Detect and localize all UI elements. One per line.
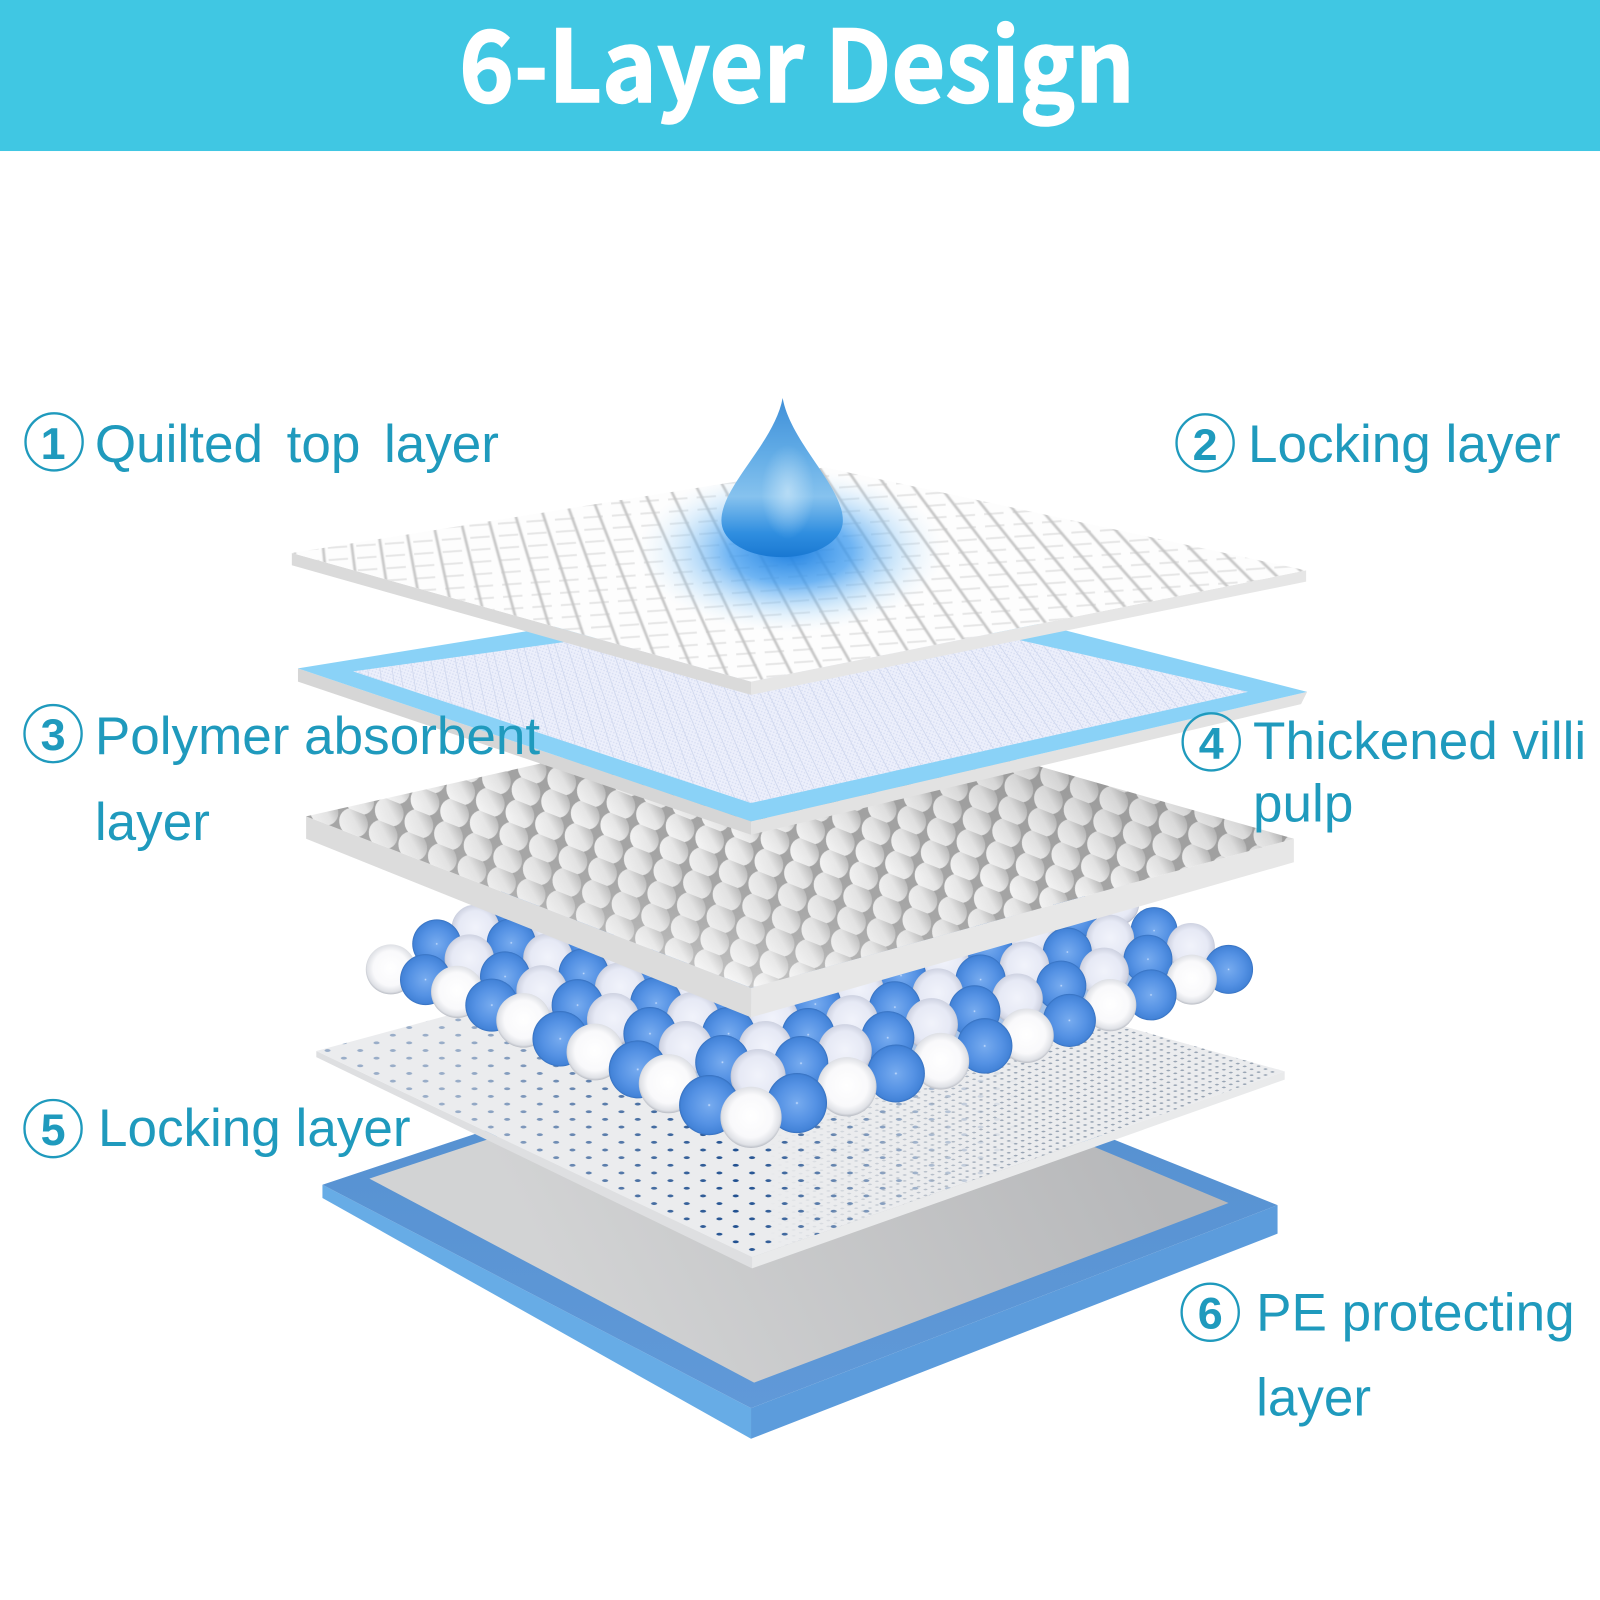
label 6: PE protecting layer: layer <box>1256 1368 1371 1427</box>
label 6: PE protecting layer: 6 <box>1198 1288 1223 1339</box>
label 4: thickened villi pulp: Thickened villi <box>1253 712 1586 771</box>
layer 6: PE protecting base <box>322 1020 1278 1439</box>
layer 4 beads: blue and white polymer balls <box>366 837 1253 1148</box>
label 3: polymer absorbent layer: Polymer absorbent <box>95 707 540 766</box>
layer 1: quilted top sheet <box>292 468 1306 695</box>
header band <box>0 0 1600 151</box>
label 6: PE protecting layer <box>1182 1284 1575 1427</box>
label 3: polymer absorbent layer: layer <box>95 793 210 852</box>
label 3: polymer absorbent layer <box>24 705 540 852</box>
label 1: quilted top layer: Quilted top layer <box>95 415 499 474</box>
label 2: locking layer: 2 <box>1193 419 1218 470</box>
label 3: polymer absorbent layer: 3 <box>41 709 66 760</box>
icon: water drop <box>721 398 843 557</box>
label 5: locking layer: 5 <box>41 1104 66 1155</box>
label 6: PE protecting layer: PE protecting <box>1256 1284 1575 1343</box>
label 1: quilted top layer: 1 <box>41 418 66 469</box>
layer 5: perforated locking sheet <box>316 1016 1284 1268</box>
layer 3: thickened villi pulp weave sheet <box>306 702 1294 1017</box>
label 2: locking layer: Locking layer <box>1248 415 1561 474</box>
label 5: locking layer: Locking layer <box>98 1099 411 1158</box>
label 4: thickened villi pulp <box>1183 712 1586 833</box>
label 4: thickened villi pulp: pulp <box>1253 774 1353 833</box>
layer 2: blue-edged locking sheet <box>298 624 1307 834</box>
label 4: thickened villi pulp: 4 <box>1199 718 1224 769</box>
